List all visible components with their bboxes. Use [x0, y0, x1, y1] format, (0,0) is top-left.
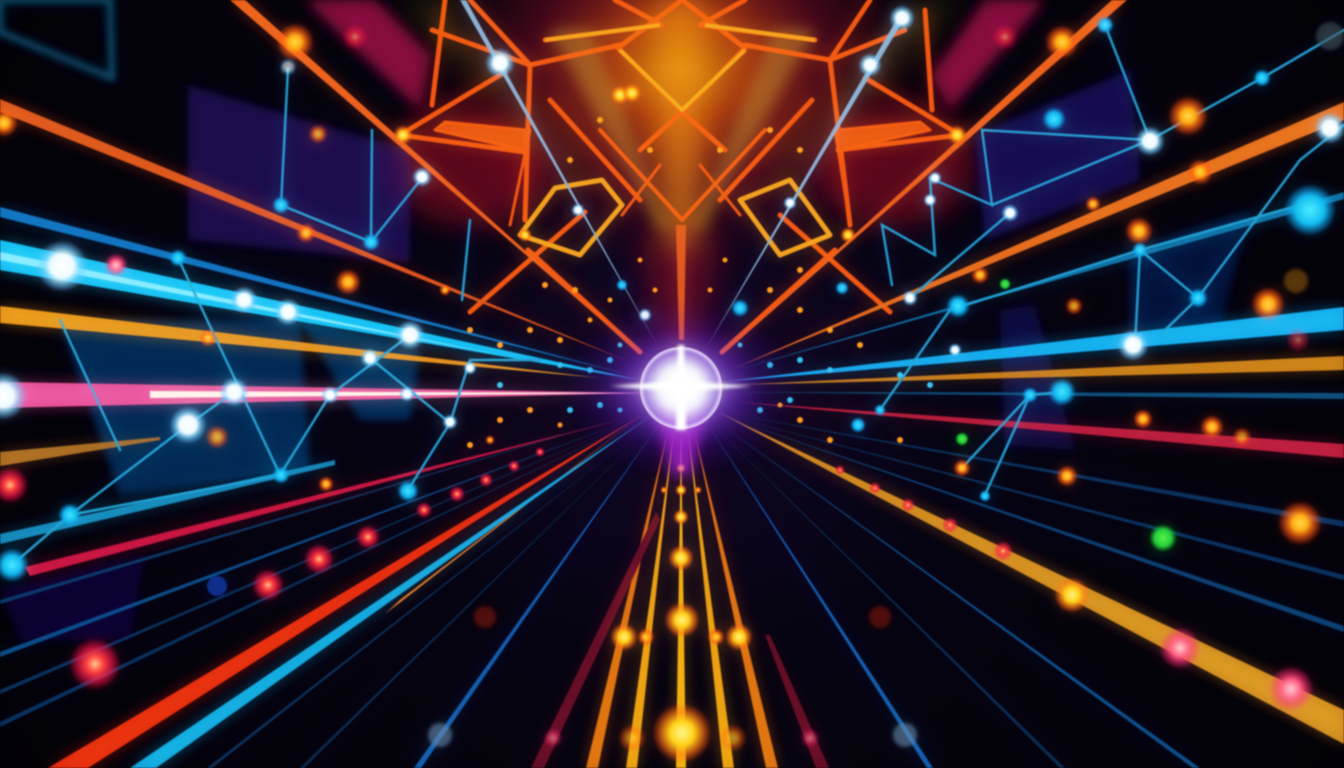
beam: right orange [730, 356, 1344, 385]
left beams [0, 99, 662, 768]
left network [12, 68, 540, 565]
bottom centre rails [531, 430, 829, 768]
beam: blue upper [0, 207, 630, 375]
panel: top-left teal outline [0, 0, 112, 78]
beam: right blue thin [720, 412, 1344, 527]
beam: red orange big [48, 415, 642, 768]
panel: left blue [60, 320, 310, 495]
central vertical ray [676, 225, 686, 340]
yellow diamond frames [520, 25, 830, 255]
beam: dim orange [0, 437, 160, 466]
beam: right amber long [718, 412, 1344, 744]
node dots left [0, 23, 652, 747]
beam: thin blue [414, 420, 662, 768]
translucent panels [0, 0, 1250, 640]
beam: crimson [25, 420, 620, 576]
beam: upper right orange [730, 102, 1344, 370]
right beams [705, 102, 1344, 768]
beam: thin blue lower left [0, 418, 620, 604]
panel: right blue [1130, 210, 1250, 330]
orange lattice [400, 0, 960, 352]
beam: right blue mid [730, 392, 1344, 399]
node dots right [731, 5, 1344, 747]
small scattered particles [467, 117, 903, 448]
top diagonal beams [230, 0, 1127, 355]
panel: centre-left blue [300, 320, 420, 420]
bottom centre lights [474, 463, 891, 763]
top orange glow [390, 0, 975, 350]
panel: upper right purple [975, 70, 1140, 240]
beam: right blue [730, 192, 1344, 372]
beam: pink white [0, 382, 650, 408]
panel: right purple [1000, 305, 1075, 450]
beam: orange middle [0, 306, 600, 378]
panel: lower left blue [0, 555, 145, 640]
beam: cyan lower [0, 460, 335, 544]
beam: bright cyan [0, 240, 640, 380]
beam: upper orange [0, 99, 630, 362]
beam: cyan big [130, 415, 652, 768]
beam: right cyan bright [720, 307, 1344, 382]
panel: upper left purple [188, 85, 410, 262]
right network [880, 25, 1344, 495]
pink bands at top [305, 0, 1045, 110]
central glowing orb [561, 298, 801, 478]
beam: right crimson [735, 402, 1344, 458]
